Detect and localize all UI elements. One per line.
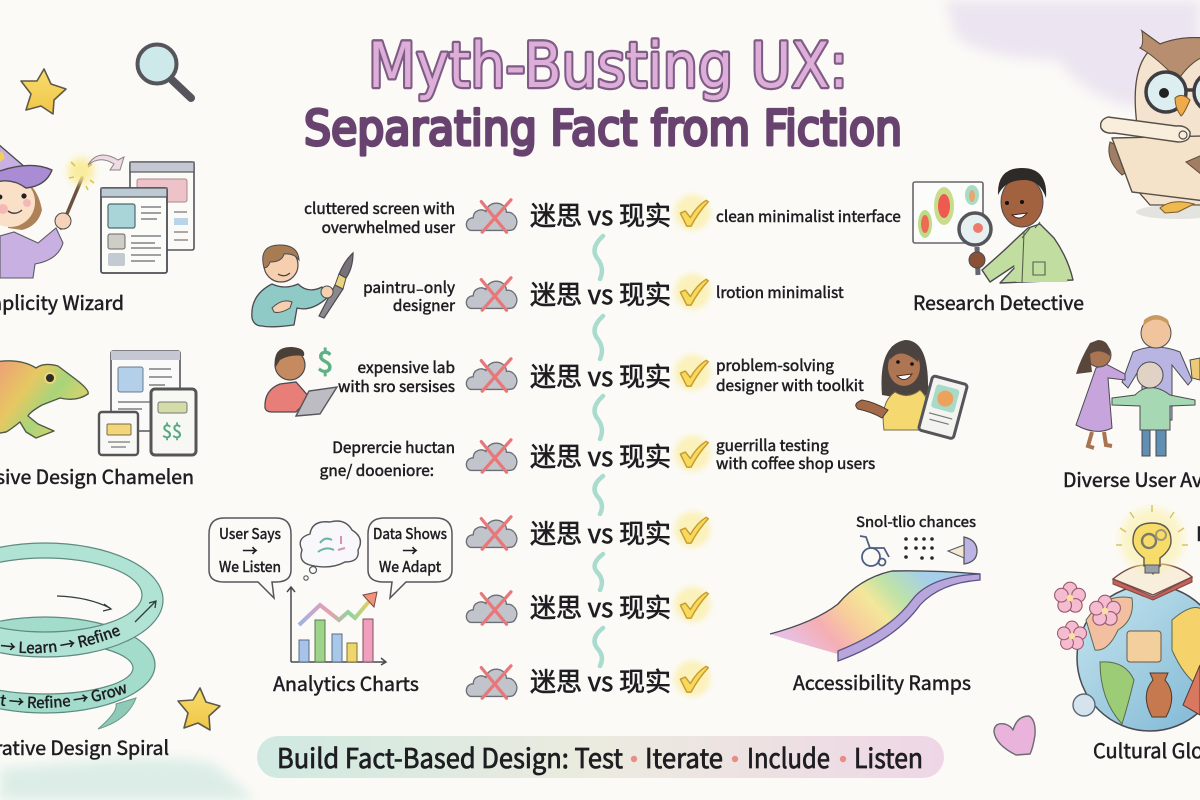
text: fact 4: with coffee shop users (716, 452, 875, 474)
thought cloud (300, 521, 360, 580)
tail of spiral (98, 698, 136, 729)
row 2 (466, 274, 710, 312)
front browser window (101, 188, 167, 273)
feet and shadow (1136, 202, 1200, 219)
elder in green (1112, 362, 1195, 456)
speech bubble: user says: → (242, 540, 258, 561)
title: Myth-Busting UX: (368, 29, 848, 102)
cherry blossoms (1055, 582, 1120, 649)
person at right edge (1190, 358, 1200, 380)
icon: heart (994, 716, 1035, 755)
row 4: 迷思 vs 现实 (530, 437, 671, 474)
man in blue (1122, 315, 1192, 420)
text: fact 2: lrotion minimalist (716, 281, 844, 303)
phone tablet with dollars: $$ (162, 418, 182, 444)
row 6 (466, 587, 710, 625)
chameleon (0, 361, 88, 438)
banner: closing message: Build Fact-Based Design: Test (277, 737, 623, 776)
shirt details (1022, 222, 1045, 283)
head (998, 168, 1046, 227)
tablet (918, 376, 968, 439)
panel: painter designer (252, 245, 353, 327)
text: myth 3: expensive lab (358, 356, 455, 378)
speech bubble: data shows: Data Shows (373, 523, 447, 544)
back browser window (130, 162, 194, 250)
chameleon eye (45, 373, 55, 383)
heatmap board (913, 182, 983, 243)
upper ring (0, 543, 163, 657)
braille dots (904, 537, 934, 560)
banner: closing message: Iterate (645, 737, 723, 776)
icon: star lower left (178, 688, 220, 730)
globe (1077, 585, 1200, 731)
text: myth 4: Deprercie huctan (332, 436, 455, 458)
row 7: 迷思 vs 现实 (530, 662, 671, 699)
book (1113, 564, 1192, 600)
text: fact 4: guerrilla testing (716, 434, 829, 456)
title (304, 29, 902, 157)
row 1 (466, 195, 710, 233)
speech bubble: user says: User Says (219, 523, 281, 544)
panel: center myth vs reality rows (466, 195, 710, 699)
row 3 (466, 355, 710, 394)
rainbow ramp (770, 571, 980, 661)
yellow shirt (883, 390, 930, 430)
text: myth 2: designer (393, 294, 455, 316)
panel: iterative design spiral (0, 542, 169, 761)
row 6: 迷思 vs 现实 (530, 588, 671, 625)
text: fact 3: designer with toolkit (716, 374, 864, 396)
pointing hand (272, 301, 292, 312)
row 4 (466, 436, 710, 474)
right hand (1186, 155, 1200, 175)
head (263, 245, 299, 282)
caption: Snol-tlio chances (856, 511, 976, 532)
teal squiggle connectors (595, 236, 603, 666)
text: fact 1: clean minimalist interface (716, 205, 901, 227)
head (275, 347, 305, 380)
speech bubble: user says (209, 518, 291, 598)
vase (1146, 673, 1172, 717)
panel: analytics charts (209, 518, 452, 697)
row 3: 迷思 vs 现实 (530, 357, 671, 394)
row 2: 迷思 vs 现实 (530, 275, 671, 312)
lightbulb (1120, 508, 1184, 573)
text: myth 4: gne/ dooeniore: (320, 459, 434, 481)
text: myth 1: cluttered screen with (304, 197, 455, 219)
scroll (1101, 117, 1200, 201)
ring arrows (57, 596, 156, 622)
label: Accessibility Ramps (793, 667, 971, 696)
row 5: 迷思 vs 现实 (530, 514, 671, 551)
bar chart (287, 587, 386, 665)
text: myth 1: overwhelmed user (322, 216, 455, 238)
text: fact 3: problem-solving (716, 354, 834, 376)
row 1: 迷思 vs 现实 (530, 196, 671, 233)
watercolor wash: bottom left (0, 758, 255, 800)
row 7 (466, 661, 710, 699)
panel: simplicity wizard (0, 143, 194, 316)
subtitle: Separating Fact from Fiction (304, 101, 902, 157)
banner: closing message: Include (747, 737, 830, 776)
small tablet (99, 412, 138, 455)
laptop (296, 387, 337, 416)
text: myth 3: with sro sersises (338, 375, 455, 397)
wizard hair and face (0, 177, 42, 230)
panel: diverse user avatars (1063, 315, 1200, 493)
shirt body fill (1012, 240, 1068, 282)
owl brow feathers (1140, 31, 1200, 80)
teal shirt (252, 284, 328, 327)
continents (1086, 597, 1200, 724)
desktop window (111, 351, 180, 431)
speech bubble: data shows: We Adapt (379, 556, 441, 577)
row 5 (466, 512, 710, 551)
banner: closing message (257, 736, 944, 778)
speech bubble: data shows (368, 518, 452, 598)
textile (1183, 665, 1200, 715)
panel: budget designer with laptop (265, 339, 337, 416)
watercolor wash: top right (945, 0, 1200, 112)
hair back (881, 340, 930, 398)
phone tablet with dollars (151, 389, 196, 455)
lower ring (0, 617, 155, 713)
curved arrow (88, 155, 124, 170)
bulb rays (1116, 505, 1188, 545)
ear icon (948, 537, 977, 564)
open arm and hand (856, 400, 888, 418)
left wing (1109, 142, 1130, 175)
green shirt (982, 224, 1073, 283)
glasses (1146, 72, 1200, 112)
wheelchair icon (860, 536, 889, 566)
panel: research detective (913, 168, 1084, 316)
panel: designer with tablet (856, 340, 968, 439)
magnifier (959, 213, 991, 275)
paintbrush (319, 253, 353, 318)
beak (1175, 95, 1190, 116)
panel: cultural globe (1055, 505, 1200, 764)
label: Research Detective (913, 287, 1084, 316)
face (888, 346, 920, 386)
wizard hat (0, 143, 52, 188)
girl in purple (1076, 340, 1125, 448)
owl body (1135, 31, 1200, 205)
magic wand (55, 158, 94, 229)
compass (1073, 694, 1095, 716)
panel: owl mascot (1101, 31, 1200, 219)
banner: closing message: Listen (854, 737, 923, 776)
center card (1127, 631, 1161, 662)
wizard robe (0, 228, 63, 278)
text: myth 2: paintru₋only (363, 276, 455, 298)
label: Analytics Charts (273, 668, 419, 697)
panel: responsive design chameleon (0, 351, 196, 490)
dollar sign: $ (317, 339, 333, 381)
icon: magnifying glass (138, 44, 191, 98)
speech bubble: data shows: → (402, 540, 418, 561)
icon: star top left (21, 69, 66, 114)
hand (969, 252, 985, 268)
panel: accessibility ramps (770, 511, 980, 696)
speech bubble: user says: We Listen (219, 556, 281, 577)
